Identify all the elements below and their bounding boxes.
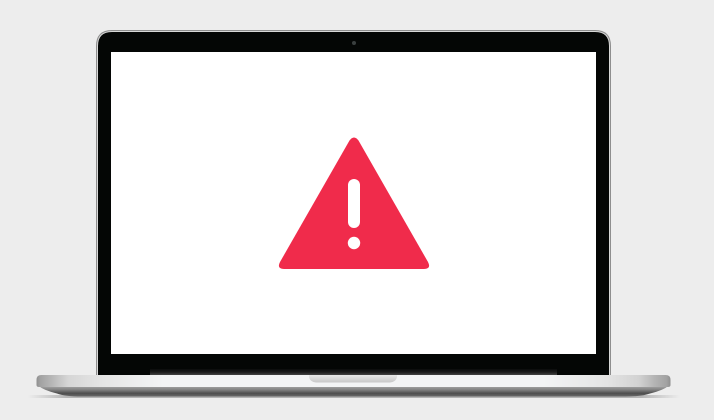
warning triangle — [279, 138, 429, 269]
exclamation dot — [348, 237, 360, 249]
warning icon — [279, 138, 429, 269]
webcam — [352, 41, 356, 45]
base shadow — [28, 395, 680, 398]
laptop lid — [96, 30, 610, 376]
exclamation bar — [348, 179, 360, 228]
laptop base — [36, 375, 670, 396]
hinge strip — [150, 369, 557, 375]
trackpad notch — [309, 375, 397, 382]
base top surface — [36, 375, 670, 387]
screen — [111, 52, 596, 354]
base underside — [39, 386, 668, 396]
